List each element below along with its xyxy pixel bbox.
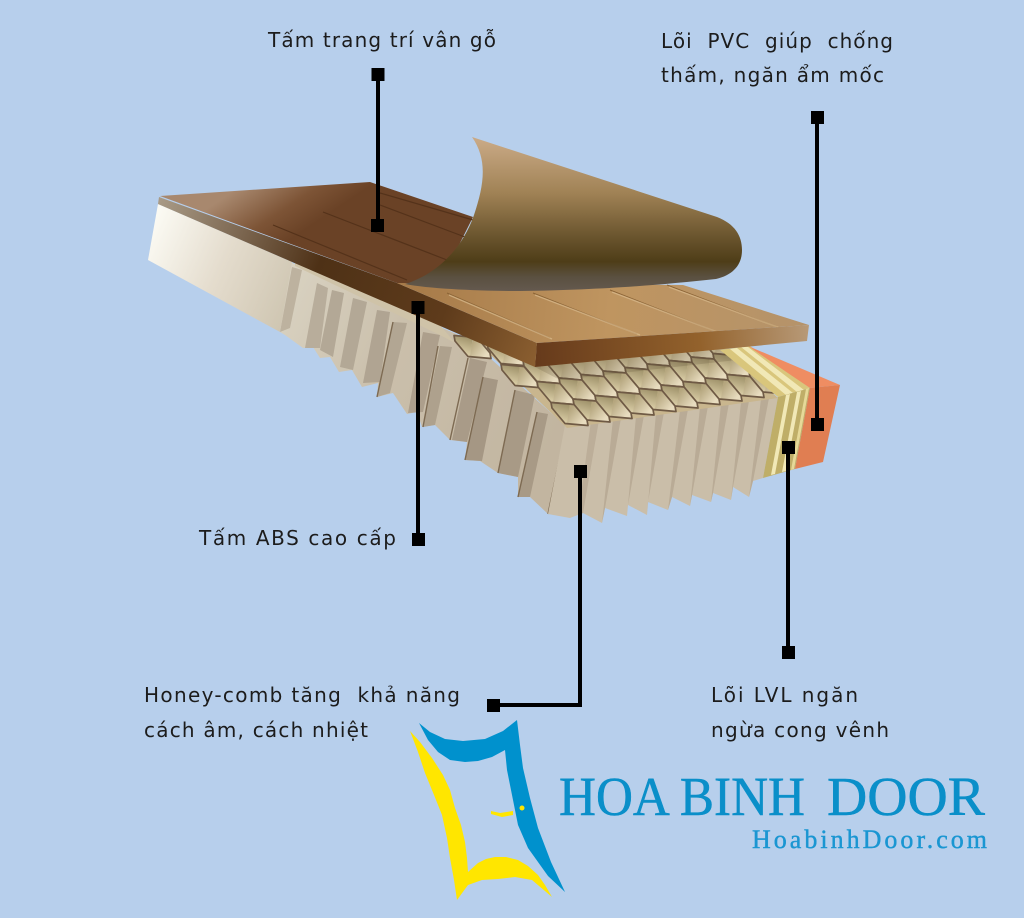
honeycomb side: left pleats	[280, 262, 570, 514]
logo website: HoabinhDoor.com	[752, 825, 987, 854]
logo wordmark	[559, 766, 985, 827]
label: PVC core: Lõi PVC giúp chống	[661, 29, 893, 53]
logo icon: door	[410, 720, 565, 900]
pointer: PVC core	[811, 111, 824, 431]
pointer: ABS sheet	[412, 301, 425, 546]
board: lit wood surface	[397, 283, 809, 343]
LVL core	[720, 346, 810, 478]
label: LVL core: Lõi LVL ngăn	[711, 683, 858, 707]
honeycomb side: front pleats	[548, 397, 778, 523]
door cross-section illustration	[148, 137, 840, 523]
white end face	[148, 204, 292, 332]
logo wordmark: DOOR	[827, 766, 985, 827]
board: dark wood surface	[160, 182, 473, 286]
label: honeycomb: Honey-comb tăng khả năng	[144, 683, 460, 707]
label: honeycomb: cách âm, cách nhiệt	[144, 718, 368, 742]
pointer: wood veneer	[371, 68, 384, 232]
board: front edge	[535, 325, 809, 367]
label: honeycomb	[144, 683, 460, 742]
label: ABS sheet: Tấm ABS cao cấp	[198, 526, 396, 550]
honeycomb top cells	[454, 332, 807, 428]
peeled wood veneer sheet	[405, 137, 742, 291]
logo wordmark: HOA BINH	[559, 766, 805, 827]
label: PVC core	[661, 29, 893, 87]
pointer: LVL core	[782, 441, 795, 659]
label: PVC core: thấm, ngăn ẩm mốc	[661, 63, 884, 87]
PVC core	[748, 346, 840, 469]
label: LVL core: ngừa cong vênh	[711, 718, 889, 742]
label: wood veneer: Tấm trang trí vân gỗ	[267, 28, 496, 52]
board: edge band	[158, 197, 537, 367]
pointer: honeycomb	[487, 465, 587, 712]
label: LVL core	[711, 683, 889, 742]
